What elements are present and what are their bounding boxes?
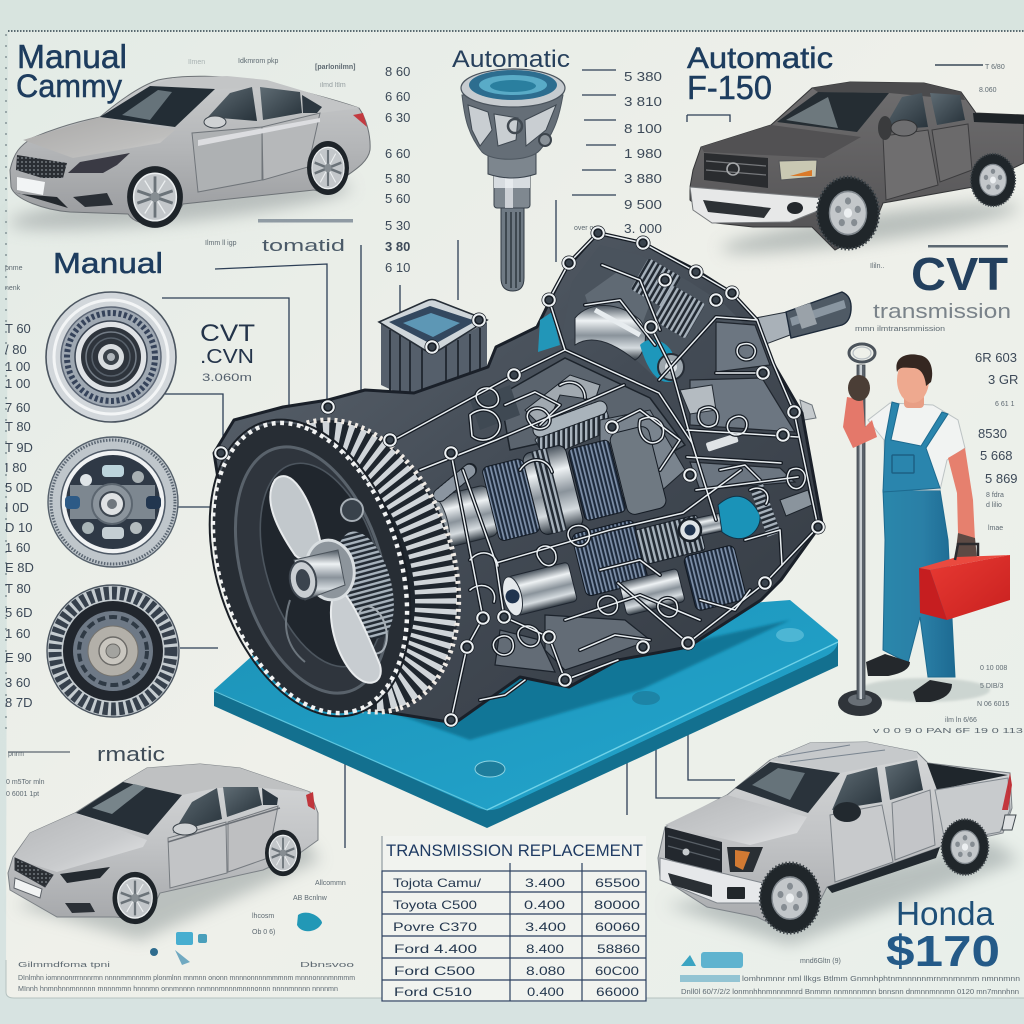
number column top (385, 64, 410, 275)
number column right: 5 668 (980, 448, 1013, 463)
bottom-left fine print: MInnh hnmnhnnmnnnnn mnnnmmn hnnnmn onnmnnnn nnmnnmnnnmnnnonnn nnnnmnnnn nnnnmn (18, 986, 338, 993)
upper bell housing (538, 245, 748, 382)
bottom-left fine print: Dbnsvoo (300, 962, 354, 969)
front face (174, 394, 446, 742)
bottom-left fine print: DInlmhn iomnnonrrrnnnrmn nnnnmmnnmm plonmlnn mnmnn ononn mnnnonnnnmmmnm mnnnonnnmnmmm (18, 975, 355, 982)
table: transmission replacement (382, 836, 646, 1002)
heading: Manual Cammy: Manual (17, 38, 127, 75)
caption top right (870, 64, 1008, 270)
heading: Honda price: $170 (886, 927, 1000, 976)
number column right: N 06 6015 (977, 701, 1009, 708)
number column right: 8 fdra (986, 492, 1004, 499)
table: transmission replacement: 8.080 (526, 964, 565, 978)
heading: CVT transmission: mmn ilmtransmmission (855, 326, 945, 333)
number column right: 8530 (978, 426, 1007, 441)
label: CVT CVN: .CVN (200, 346, 254, 368)
bottom-left fine print: Allcommn (315, 880, 346, 887)
caption top right: 8.060 (979, 87, 997, 94)
bottom-left fine print (18, 880, 355, 993)
number column right: 6 61 1 (995, 401, 1015, 408)
left number column: 5 6D (5, 605, 32, 620)
arm left (843, 397, 877, 448)
heading: Automatic F-150: Automatic (687, 42, 833, 75)
table: transmission replacement: Tojota Camu/ (393, 876, 482, 890)
label: automatic smudge: Ilmm ll igp (205, 240, 237, 247)
number column: automatic: 5 380 (624, 69, 662, 84)
boots (866, 654, 910, 676)
table: transmission replacement: 0.400 (527, 985, 564, 999)
truck: dark F-150 (690, 82, 1024, 263)
bottom-right fine print: mnd6Gltn (9) (800, 958, 841, 965)
top center housing (470, 358, 739, 510)
number column right: lmae (988, 525, 1003, 532)
head (896, 354, 932, 403)
gear ring teeth (210, 392, 494, 740)
side knob (800, 400, 816, 420)
left number column: nenk (5, 285, 21, 292)
heading: Automatic F-150 (687, 42, 833, 106)
number column right: d lilio (986, 502, 1002, 509)
label: matic: rmatic (97, 744, 165, 766)
number column: automatic: 9 500 (624, 197, 662, 212)
number column right: 5 869 (985, 471, 1018, 486)
component: torque shaft (461, 69, 565, 291)
left number column: 7 60 (5, 400, 30, 415)
left number column (5, 265, 34, 710)
label: matic: pnrm (8, 751, 24, 758)
left number column: pnme (5, 265, 23, 272)
number column: automatic: 3 880 (624, 171, 662, 186)
arm right (948, 448, 975, 540)
table: transmission replacement: Ford C510 (394, 985, 472, 999)
left number column: 1 00 (5, 376, 30, 391)
table: transmission replacement: TRANSMISSION REPLACEMENT (386, 841, 643, 860)
number column right (873, 350, 1023, 735)
label: automatic smudge: tomatid (262, 236, 345, 255)
label: automatic smudge (205, 236, 345, 255)
heading: CVT transmission (855, 248, 1011, 333)
number column right: 0 10 008 (980, 665, 1007, 672)
table: transmission replacement: 8.400 (526, 942, 564, 956)
table: transmission replacement: Toyota C500 (393, 898, 477, 912)
bottom-right fine print: Dnll0l 60/7/2/2 lonmnhhnmnnnmnrd Bnmmn nnmnnnmnn bnnsnn dnmnnmnnmn 0120 mn7mnnhnn (681, 989, 1019, 996)
wheel spokes (270, 476, 381, 683)
left number column: I 80 (5, 460, 27, 475)
number column top: 5 60 (385, 191, 410, 206)
component disc: torque converter (47, 585, 179, 717)
number column: automatic: 3. 000 (624, 221, 662, 236)
heading: CVT transmission: transmission (873, 301, 1011, 323)
left number column: 1 00 (5, 359, 30, 374)
toolbox (919, 544, 1010, 620)
table: transmission replacement: 0.400 (524, 898, 565, 912)
tube ribs (394, 233, 818, 720)
left number column: 8 7D (5, 695, 32, 710)
caption top right: T 6/80 (985, 64, 1005, 71)
caption top left (188, 58, 355, 222)
left number column: E 90 (5, 650, 32, 665)
lower housing (495, 615, 650, 672)
caption top left: Idkmrom pkp (238, 58, 279, 65)
table: transmission replacement: 3.400 (525, 876, 565, 890)
heading: Manual: Manual (53, 248, 163, 280)
number column top: 5 30 (385, 218, 410, 233)
hand on pole (848, 375, 870, 401)
component disc: planetary (48, 437, 178, 567)
left number column: 5 0D (5, 480, 32, 495)
left number column: T 80 (5, 419, 31, 434)
number column top: 6 60 (385, 146, 410, 161)
heading: Manual Cammy: Cammy (16, 68, 122, 104)
left number column: E 8D (5, 560, 34, 575)
left number column: T 9D (5, 440, 33, 455)
transmission assembly (174, 226, 851, 742)
label: CVT CVN: CVT (200, 320, 255, 347)
number column right: 5 DIB/3 (980, 683, 1003, 690)
left number column: 1 60 (5, 540, 30, 555)
bottom-right fine print: lomhnmnnr nml llkgs Btlmm Gnmnhphtnmnnnnnmrnmnmnmm nmnnmnn (742, 976, 1020, 983)
label: matic: 0 6001 1pt (6, 791, 39, 798)
output shaft (745, 292, 851, 350)
left number column: / 80 (5, 342, 27, 357)
bottom-left fine print: AB Bcnlnw (293, 895, 328, 902)
number column right: 6R 603 (975, 350, 1017, 365)
number column top: 3 80 (385, 239, 410, 254)
table: transmission replacement: 3.400 (525, 920, 566, 934)
heading: Honda price (886, 895, 1000, 976)
lower shaft assembly (499, 483, 812, 618)
heading: Honda price: Honda (896, 895, 995, 932)
internal gear behind spokes (326, 499, 404, 657)
number column top: 6 60 (385, 89, 410, 104)
left number column: 3 60 (5, 675, 30, 690)
component disc: clutch (46, 292, 176, 422)
shadow under transmission (300, 620, 790, 740)
table: transmission replacement: 60C00 (595, 964, 639, 978)
heading: Automatic small: Automatic (452, 46, 570, 73)
car: silver Camry bottom (8, 764, 320, 940)
left number column: 1 60 (5, 626, 30, 641)
number column: automatic (574, 69, 662, 236)
overall bib (883, 402, 948, 492)
pole (838, 344, 882, 716)
table: transmission replacement: Ford 4.400 (394, 942, 477, 956)
shirt (868, 403, 965, 490)
table: transmission replacement: 65500 (595, 876, 640, 890)
hand on toolbox (955, 533, 977, 558)
bottom-left fine print: lhcosm (252, 913, 274, 920)
number column right: 3 GR (988, 372, 1018, 387)
number column: automatic: 1 980 (624, 146, 662, 161)
table: transmission replacement: 80000 (594, 898, 640, 912)
caption top left: ilmd ltlm (320, 82, 346, 89)
label: matic: 0 m5Tor mln (6, 779, 45, 786)
upper gear cluster (426, 425, 668, 550)
base plate (214, 600, 838, 828)
number column top: 8 60 (385, 64, 410, 79)
table: transmission replacement: 60060 (595, 920, 640, 934)
bolts (214, 226, 826, 728)
bottom-left fine print: Gilmmdfoma tpni (18, 962, 111, 969)
heading: CVT transmission: CVT (911, 248, 1008, 300)
number column: automatic: over ooo (574, 225, 601, 232)
bottom-right fine print (680, 952, 1020, 996)
springs (440, 408, 600, 495)
number column right: ilm ln 6/66 (945, 717, 977, 724)
mechanic (838, 344, 1010, 716)
housing (214, 233, 822, 723)
number column top: 6 30 (385, 110, 410, 125)
number column: automatic: 8 100 (624, 121, 662, 136)
number column: automatic: 3 810 (624, 94, 662, 109)
truck: silver F-150 (658, 742, 1020, 945)
table: transmission replacement: Ford C500 (394, 964, 475, 978)
number column right: v 0 0 9 0 PAN 6F 19 0 113 (873, 728, 1023, 735)
label: CVT CVN: 3.060m (202, 372, 252, 384)
table: transmission replacement: 66000 (596, 985, 639, 999)
table: transmission replacement: 58860 (597, 942, 640, 956)
heading: Automatic F-150: F-150 (687, 69, 772, 106)
caption top left: [parlonilmn] (315, 64, 355, 71)
legs (883, 490, 955, 677)
bottom-left fine print: Ob 0 6) (252, 929, 275, 936)
left number column: T 60 (5, 321, 31, 336)
table: transmission replacement: Povre C370 (393, 920, 477, 934)
label: matic (6, 744, 165, 798)
leader lines (162, 70, 735, 848)
caption top left: Ilmen (188, 59, 205, 66)
heading: Manual Cammy (16, 38, 127, 104)
neck (904, 394, 924, 408)
valve block (379, 300, 487, 410)
left number column: T 80 (5, 581, 31, 596)
left number column: I 0D (5, 500, 29, 515)
caption top right: Ililn.. (870, 263, 884, 270)
label: CVT CVN (200, 320, 255, 384)
car: silver Camry top (7, 76, 370, 240)
left number column: D 10 (5, 520, 32, 535)
number column top: 6 10 (385, 260, 410, 275)
number column top: 5 80 (385, 171, 410, 186)
right housing panels (690, 322, 795, 490)
